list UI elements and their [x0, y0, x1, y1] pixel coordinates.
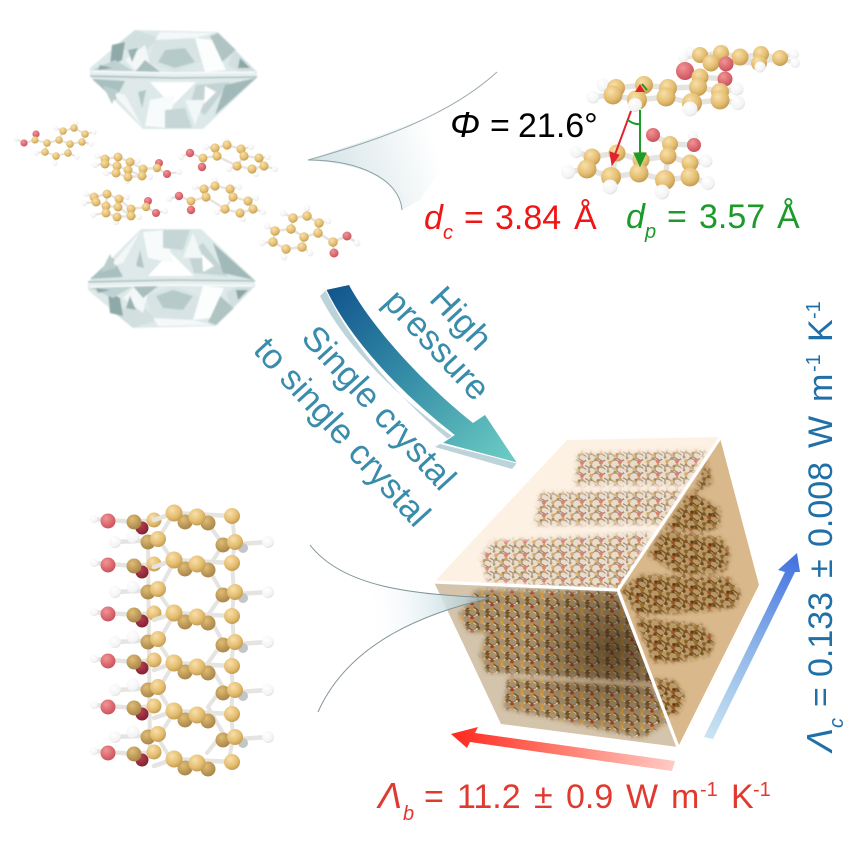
molecule 6 — [259, 205, 360, 260]
label: perpendicular distance: Å — [777, 198, 800, 236]
label: perpendicular distance: = — [667, 198, 687, 236]
middle molecule — [586, 68, 745, 116]
molecular dimer with stacking geometry — [561, 43, 800, 200]
label: thermal conductivity c axis: = — [802, 687, 840, 707]
label: thermal conductivity c axis: W — [802, 416, 840, 448]
label: thermal conductivity b axis: Λ — [376, 775, 402, 816]
callout wedge: lower zoom — [310, 545, 490, 712]
label: thermal conductivity c axis: -1 — [803, 301, 825, 319]
label: thermal conductivity b axis: m — [671, 778, 699, 816]
top face — [436, 437, 718, 588]
right face — [620, 440, 759, 745]
label: thermal conductivity b axis: W — [626, 778, 658, 816]
callout wedge: upper zoom — [308, 72, 497, 210]
label: perpendicular distance: 3.57 — [699, 198, 765, 236]
stack bonds — [148, 513, 235, 763]
molecule 5 — [166, 177, 266, 222]
molecule 3 — [178, 138, 278, 177]
label: thermal conductivity c axis: 0.133 — [802, 592, 840, 677]
label: thermal conductivity b axis: -1 — [700, 779, 718, 801]
label: phi angle: 21.6° — [518, 107, 598, 145]
label: thermal conductivity b axis: b — [403, 803, 414, 825]
label: phi angle: = — [490, 107, 510, 145]
label: centroid distance: = — [464, 199, 484, 237]
label: thermal conductivity b axis: K — [731, 778, 754, 816]
label: thermal conductivity c axis: 0.008 — [802, 462, 840, 547]
arrow: high pressure curved — [320, 285, 517, 469]
label: high pressure: High — [422, 279, 500, 358]
cube of crystal lattice — [434, 437, 759, 747]
molecule 4 — [81, 190, 168, 225]
label: centroid distance: 3.84 — [495, 199, 561, 237]
label: centroid distance: Å — [574, 199, 597, 237]
label: thermal conductivity b axis: 0.9 — [566, 778, 613, 816]
label: thermal conductivity b axis: 11.2 — [457, 778, 521, 816]
label: phi angle: Φ — [450, 104, 480, 145]
label: high pressure: pressure — [376, 282, 498, 408]
label: single crystal to single crystal: Single crystal — [294, 318, 463, 498]
molecule 1 — [13, 120, 97, 166]
arrow: blue out-of-plane direction — [704, 553, 800, 739]
icon: upper diamond anvil — [90, 30, 257, 129]
arrows: red and green distances — [610, 84, 647, 166]
label: thermal conductivity c axis: ± — [802, 559, 840, 578]
label: thermal conductivity c axis: m — [802, 374, 840, 402]
label: single crystal to single crystal: to single crystal — [246, 330, 438, 534]
molecules compressed between anvils — [13, 120, 360, 260]
top molecule — [676, 43, 800, 80]
label: thermal conductivity b axis: -1 — [753, 779, 771, 801]
label: thermal conductivity c axis: -1 — [803, 354, 825, 372]
icon: lower diamond anvil — [88, 229, 255, 328]
label: thermal conductivity c axis: Λ — [799, 728, 840, 754]
cube edges — [434, 438, 720, 747]
label: thermal conductivity b axis: = — [424, 778, 444, 816]
label: thermal conductivity c axis: c — [826, 718, 848, 728]
label: centroid distance: d — [424, 199, 444, 237]
molecular stack side view — [90, 504, 274, 776]
label: thermal conductivity c axis: K — [802, 319, 840, 342]
bottom molecule — [561, 128, 715, 200]
label: perpendicular distance: d — [626, 198, 646, 236]
molecule 2 — [92, 152, 182, 184]
label: perpendicular distance: p — [644, 221, 656, 243]
row atoms — [90, 504, 274, 776]
label: thermal conductivity b axis: ± — [534, 778, 553, 816]
arrow: red in-plane direction — [451, 727, 675, 771]
left face — [434, 584, 676, 747]
label: centroid distance: c — [443, 222, 453, 244]
